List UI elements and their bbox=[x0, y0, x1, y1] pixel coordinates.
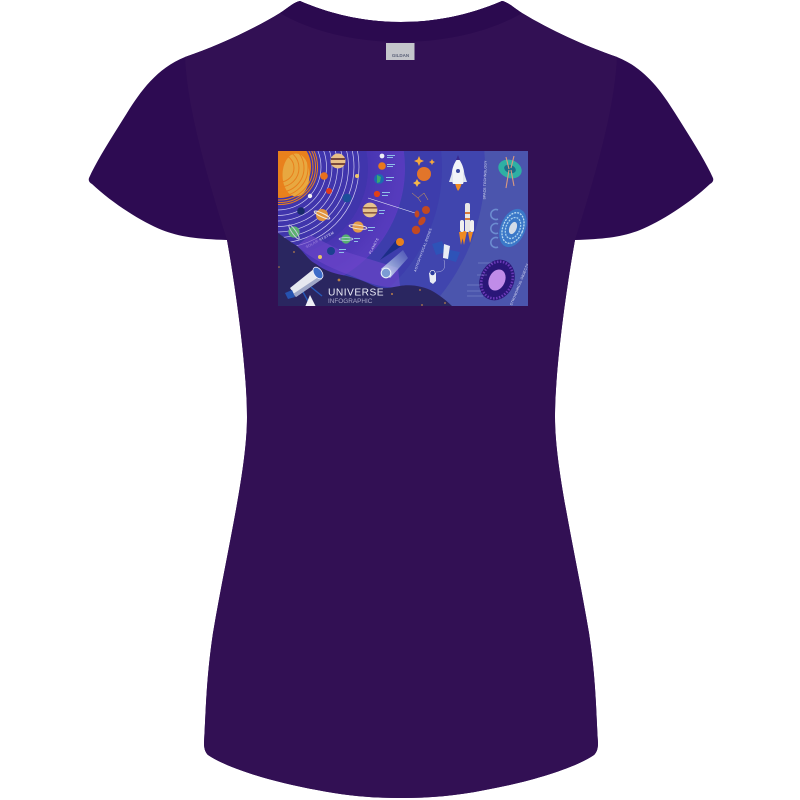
neck label: GILDAN bbox=[392, 53, 409, 58]
icon: dark blue planet bbox=[297, 207, 305, 215]
icon: orange giant bbox=[417, 167, 431, 181]
icon: ringed saturn bbox=[314, 209, 330, 221]
icon: red planet bbox=[326, 188, 332, 194]
icon: satellite bbox=[432, 241, 460, 262]
icon: fireball meteor bbox=[380, 238, 404, 260]
panel: astrophysical bodies bbox=[368, 156, 435, 278]
panel: space technology bbox=[429, 155, 488, 284]
infographic print bbox=[278, 151, 528, 306]
heading: planets: PLANETS bbox=[368, 237, 380, 255]
icon: spiral galaxy bbox=[494, 205, 532, 251]
icon: pluto bbox=[318, 255, 322, 259]
small hill stars bbox=[278, 251, 446, 306]
icon: orange planet bbox=[378, 162, 386, 170]
icon: black hole bbox=[496, 156, 524, 188]
icon: astronaut bbox=[429, 270, 436, 284]
icon: saturn bbox=[349, 221, 367, 233]
t-shirt silhouette and sleeves bbox=[89, 1, 713, 798]
subtitle: INFOGRAPHIC bbox=[328, 298, 373, 305]
icon: star lower bbox=[413, 179, 421, 187]
t-shirt body panel bbox=[185, 1, 617, 798]
icon: earth bbox=[374, 174, 384, 184]
icon: blue planet bbox=[343, 194, 351, 202]
icon: orange planet bbox=[320, 172, 328, 180]
icon: asteroids bbox=[412, 206, 430, 234]
icon: gauge arcs bbox=[491, 210, 498, 248]
heading: space technology: SPACE TECHNOLOGY bbox=[482, 160, 488, 200]
purple glow bbox=[297, 235, 400, 287]
icon: star small bbox=[429, 159, 435, 165]
neck label bbox=[386, 43, 414, 60]
icon: comet bbox=[381, 250, 408, 278]
icon: nebula bbox=[473, 254, 521, 306]
nebula leader lines bbox=[467, 263, 492, 296]
icon: sun bbox=[278, 151, 318, 205]
planet data labels bbox=[339, 155, 395, 253]
orbits bbox=[278, 151, 360, 246]
icon: jupiter bbox=[363, 203, 377, 217]
dark hills bbox=[278, 233, 453, 307]
heading: solar system: SOLAR SYSTEM bbox=[305, 231, 335, 249]
icon: red planet bbox=[374, 191, 380, 197]
icon: telescope bbox=[285, 265, 325, 307]
icon: jupiter bbox=[330, 154, 346, 168]
pointer line bbox=[368, 198, 415, 213]
icon: shuttle bbox=[449, 155, 467, 191]
icon: multi-stage rocket bbox=[459, 203, 474, 245]
heading: astronomical objects: ASTRONOMICAL OBJECTS bbox=[508, 262, 530, 308]
t-shirt with printed universe infographic bbox=[88, 1, 714, 798]
constellation bbox=[412, 193, 428, 202]
title: UNIVERSE bbox=[328, 288, 384, 298]
icon: neptune bbox=[327, 247, 335, 255]
icon: white dwarf planet bbox=[380, 154, 384, 158]
panel: astronomical objects bbox=[467, 156, 532, 308]
tether bbox=[436, 260, 445, 272]
collar band bbox=[280, 1, 522, 42]
heading: astrophysical bodies: ASTROPHYSICAL BODIES bbox=[413, 227, 433, 272]
panel: planets bbox=[318, 154, 395, 259]
icon: white planet bbox=[308, 194, 312, 198]
icon: uranus bbox=[339, 234, 353, 244]
icon: yellow planet bbox=[355, 174, 359, 178]
icon: star large bbox=[414, 156, 424, 166]
panel: solar system bbox=[278, 151, 360, 246]
icon: ringed green planet bbox=[288, 224, 300, 240]
